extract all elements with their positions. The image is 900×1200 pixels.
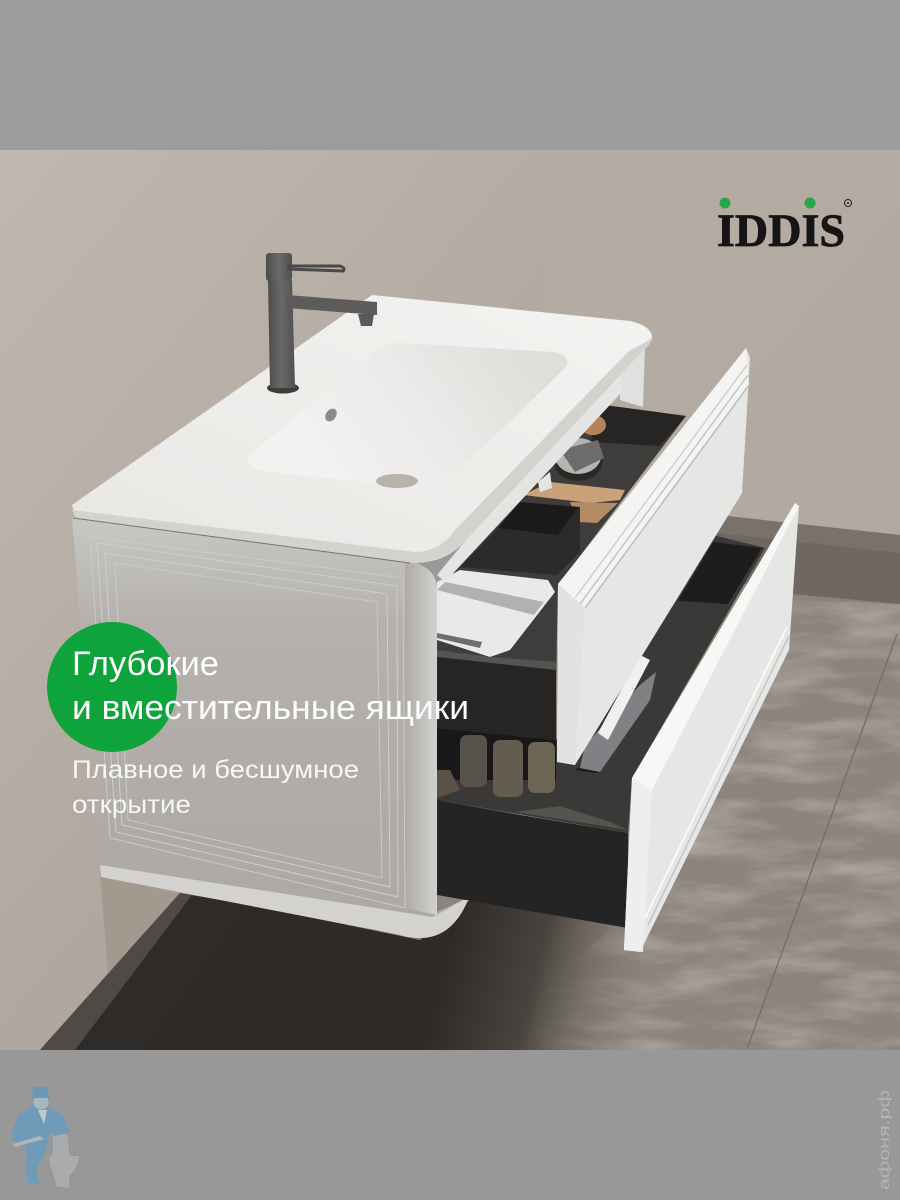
small jars xyxy=(437,735,555,798)
heading: deep drawers: Глубокие xyxy=(72,645,219,683)
shelf shadow xyxy=(437,728,556,780)
under rail xyxy=(437,370,622,582)
cabinet back side strip xyxy=(620,345,645,407)
lower drawer front xyxy=(624,503,799,952)
wrench xyxy=(13,1136,44,1147)
heading: deep drawers xyxy=(72,645,469,727)
lower drawer front box xyxy=(437,800,628,928)
black organizer box xyxy=(460,502,580,575)
toilet xyxy=(49,1134,80,1189)
wash basin xyxy=(247,343,567,488)
logo: IDDIS: IDDIS xyxy=(717,205,845,257)
dark floor area xyxy=(140,900,640,1050)
faucet xyxy=(266,253,377,394)
left wall xyxy=(0,150,545,1050)
left wall under cabinet xyxy=(100,872,182,975)
cabinet vanity xyxy=(72,253,799,952)
lower drawer dark floor xyxy=(437,535,765,833)
lower drawer interior xyxy=(437,535,765,928)
top gray band xyxy=(0,0,900,150)
subtext: smooth opening: Плавное и бесшумное xyxy=(72,756,359,784)
sink countertop xyxy=(72,295,652,582)
upper drawer front xyxy=(557,348,750,765)
right baseboard xyxy=(700,513,900,553)
panel frame mouldings xyxy=(90,537,405,908)
floor tile seam xyxy=(747,634,897,1049)
icon: plumber mascot xyxy=(12,1087,80,1189)
overflow xyxy=(323,406,339,424)
comb and round accessory xyxy=(553,439,603,481)
marble floor xyxy=(140,528,900,1050)
basin drain xyxy=(376,474,418,488)
bottom gray band xyxy=(0,1050,900,1200)
callout: green circle xyxy=(47,622,177,752)
upper drawer dark floor xyxy=(437,405,686,680)
right wall xyxy=(545,150,900,550)
upper drawer front box xyxy=(437,653,556,740)
shirt xyxy=(38,1110,47,1124)
bottom edge band xyxy=(100,865,468,938)
upper floor tile xyxy=(700,528,900,604)
head xyxy=(34,1094,48,1110)
striped towel xyxy=(437,570,555,657)
watermark: афоня.рф xyxy=(876,1090,893,1190)
body xyxy=(12,1106,70,1184)
rounded corner highlight xyxy=(405,560,437,915)
upper drawer interior xyxy=(437,405,686,740)
folded towel xyxy=(580,672,656,772)
heading: deep drawers: и вместительные ящики xyxy=(72,689,469,727)
left baseboard xyxy=(40,893,250,1050)
product photo scene xyxy=(0,150,900,1050)
subtext: smooth opening xyxy=(72,756,359,819)
subtext: smooth opening: открытие xyxy=(72,791,191,819)
wooden brush xyxy=(523,482,625,503)
marble texture xyxy=(566,602,900,1050)
cabinet side panel xyxy=(72,517,468,938)
